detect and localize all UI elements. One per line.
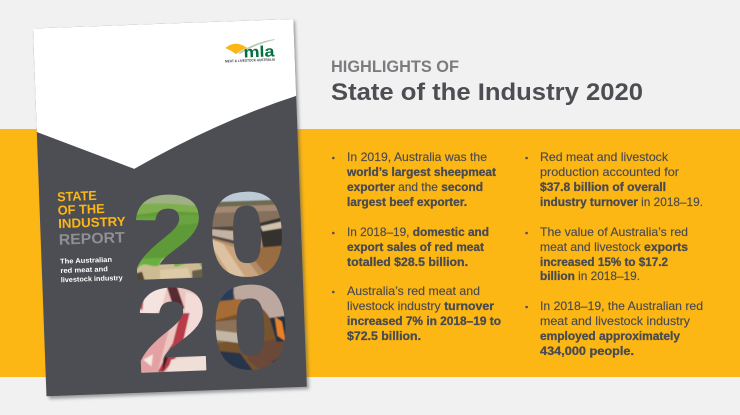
heading: HIGHLIGHTS OF	[331, 57, 459, 76]
cover title: OF THE	[57, 201, 105, 218]
bullet: production: industry turnover in 2018–19.	[540, 195, 703, 209]
bullets column 2	[525, 150, 703, 358]
bullet: exports: The value of Australia’s red	[540, 225, 688, 239]
MLA logo	[224, 39, 276, 63]
cover subtitle: livestock industry	[61, 275, 123, 284]
bullet: employment: employed approximately	[540, 329, 680, 343]
bullet: employment: 434,000 people.	[540, 344, 634, 358]
cover title	[57, 187, 127, 249]
bullet: industry turnover	[332, 284, 501, 343]
cover title: INDUSTRY	[58, 214, 126, 231]
cover white top	[33, 19, 299, 172]
bullet: sheepmeat exporter: In 2019, Australia was the	[347, 150, 487, 164]
bullet: employment: meat and livestock industry	[540, 314, 690, 328]
photo-filled numeral 0 top: 0	[205, 167, 290, 303]
cover subtitle: The Australian	[60, 257, 112, 266]
photo-filled numeral 0 bottom: 0	[208, 260, 293, 396]
photo-filled numeral 2 top: 2	[129, 170, 208, 305]
bullet: domestic and export sales	[332, 225, 489, 269]
cover dark background	[33, 19, 307, 396]
bullet: industry turnover: $72.5 billion.	[347, 329, 421, 343]
bullet: industry turnover: increased 7% in 2018–19 to	[347, 314, 501, 328]
bullet: sheepmeat exporter: largest beef exporter.	[347, 195, 467, 209]
bullet: production: $37.8 billion of overall	[540, 180, 666, 194]
bullet: domestic and export sales: In 2018–19, domestic and	[347, 225, 489, 239]
MLA logo: MEAT & LIVESTOCK AUSTRALIA	[225, 58, 276, 63]
bullet: production: production accounted for	[540, 165, 679, 179]
bullet: production: Red meat and livestock	[540, 150, 669, 164]
heading: State of the Industry 2020	[331, 79, 643, 106]
bullet: sheepmeat exporter: world’s largest sheepmeat	[346, 165, 496, 179]
cover subtitle	[60, 256, 123, 284]
yellow band	[0, 129, 740, 377]
cover subtitle: red meat and	[60, 266, 108, 275]
report cover	[33, 19, 309, 402]
bullet: exports: increased 15% to $17.2	[540, 255, 668, 269]
MLA logo: mla	[243, 43, 275, 61]
bullets column 1	[332, 150, 501, 343]
bullet: domestic and export sales: export sales of red meat	[347, 240, 484, 254]
bullet: sheepmeat exporter: exporter and the second	[347, 180, 483, 194]
bullet: exports: billion in 2018–19.	[540, 269, 640, 283]
heading	[331, 57, 643, 106]
bullet: domestic and export sales: totalled $28.5 billion.	[347, 255, 468, 269]
cover title: STATE	[57, 188, 97, 204]
cover title: REPORT	[58, 229, 125, 249]
bullet: industry turnover: livestock industry turnover	[347, 299, 494, 313]
bullet: employment: In 2018–19, the Australian red	[540, 299, 703, 313]
photo-filled numeral 2 bottom: 2	[133, 263, 212, 398]
bullet: production	[525, 150, 703, 209]
bullet: exports	[525, 225, 688, 283]
bullet: industry turnover: Australia’s red meat and	[347, 284, 480, 298]
bullet: sheepmeat exporter	[332, 150, 496, 209]
bullet: exports: meat and livestock exports	[540, 240, 688, 254]
bullet: employment	[525, 299, 703, 358]
